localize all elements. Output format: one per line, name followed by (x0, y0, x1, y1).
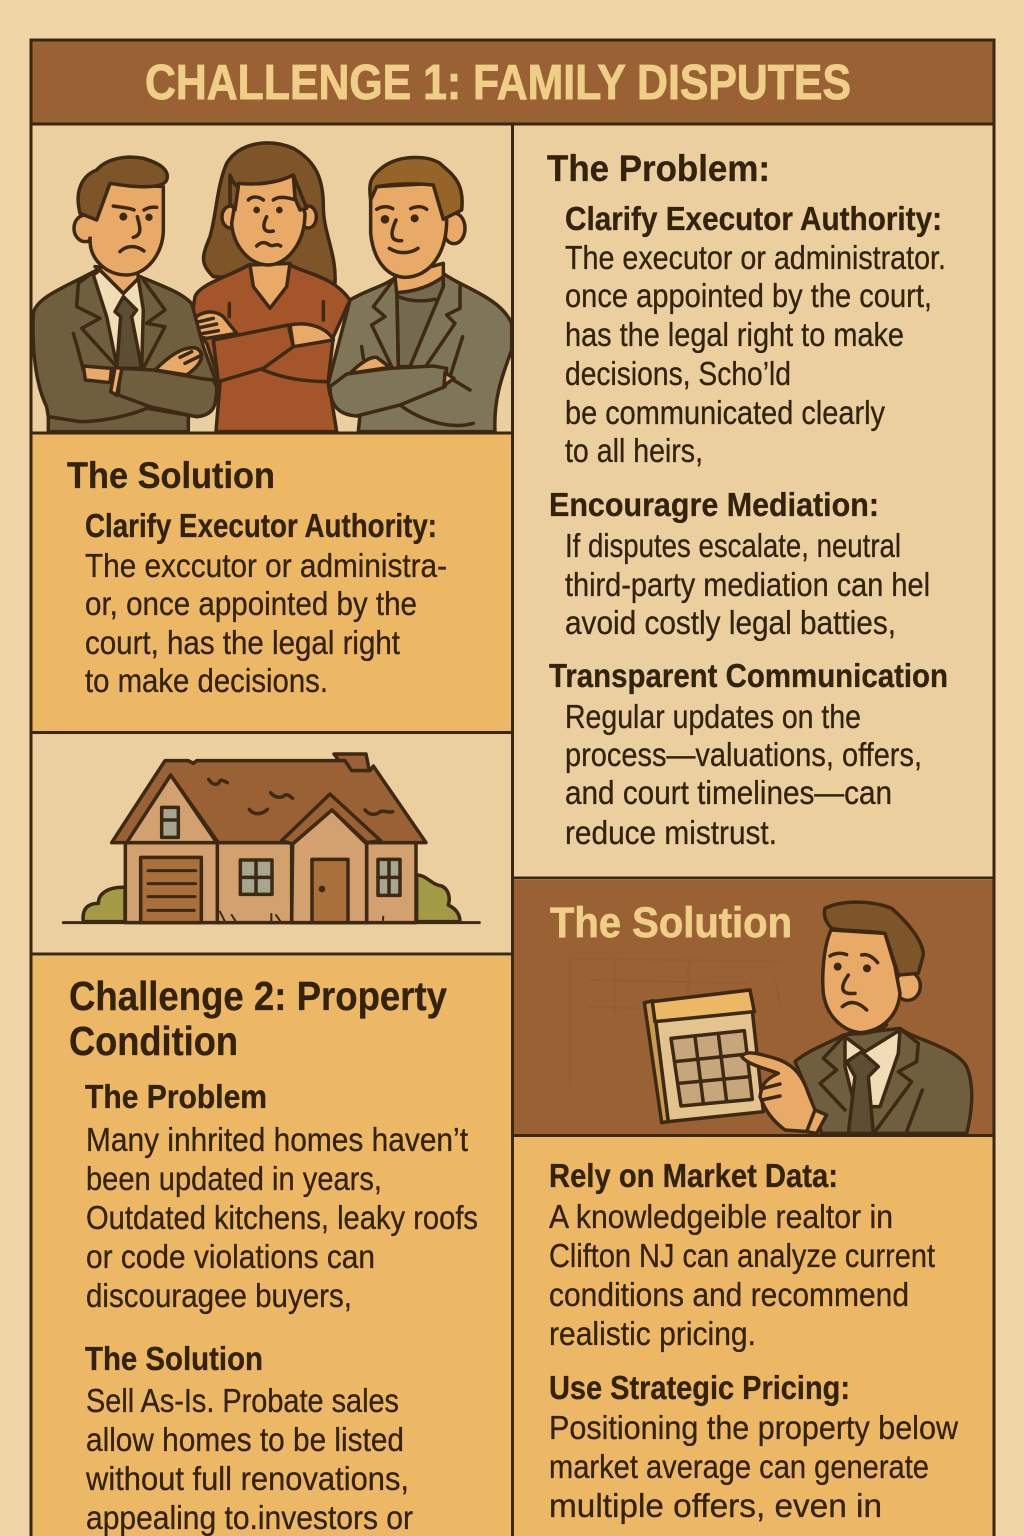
panel: challenge 2 property condition: Outdated kitchens, leaky roofs (86, 1199, 478, 1236)
panel: challenge 2 property condition: Many inhrited homes haven’t (86, 1121, 468, 1158)
panel: market data and pricing: Rely on Market Data: (549, 1157, 838, 1194)
panel: the problem, right column: decisions, Scho’ld (565, 355, 791, 392)
panel: the problem, right column: If disputes escalate, neutral (565, 527, 901, 564)
title banner (31, 40, 994, 124)
panel: challenge 2 property condition: appealing to.investors or (86, 1499, 413, 1536)
panel: the solution, challenge 1: or, once appointed by the (85, 585, 417, 622)
panel: challenge 2 property condition: Challenge 2: Property (69, 973, 447, 1019)
panel: market data and pricing: conditions and recommend (549, 1276, 909, 1313)
panel: the problem, right column: to all heirs, (565, 432, 703, 469)
panel: the problem, right column: Transparent Communication (549, 657, 948, 694)
panel: the problem, right column: reduce mistrust. (565, 814, 777, 851)
panel: challenge 2 property condition: Condition (69, 1018, 238, 1064)
panel: the problem, right column: third-party mediation can hel (565, 566, 930, 603)
man left (48, 407, 188, 432)
panel: market data and pricing: Clifton NJ can analyze current (549, 1237, 935, 1274)
panel: the problem, right column: Encouragre Mediation: (549, 486, 879, 523)
panel: the problem, right column: and court timelines—can (565, 774, 892, 811)
panel: market data and pricing (514, 1137, 993, 1536)
panel: the problem, right column: has the legal right to make (565, 316, 904, 353)
panel: the solution banner with advisor: The Solution (550, 899, 792, 947)
panel: challenge 2 property condition: The Solution (85, 1340, 263, 1377)
panel: market data and pricing: Use Strategic Pricing: (549, 1369, 850, 1406)
panel: the problem, right column: avoid costly legal batties, (565, 604, 896, 641)
panel: the solution, challenge 1: court, has the legal right (85, 624, 400, 661)
panel: challenge 2 property condition: The Problem (85, 1078, 267, 1115)
panel: the solution banner with advisor (514, 880, 993, 1134)
panel: market data and pricing: A knowledgeible realtor in (549, 1198, 893, 1235)
panel: challenge 2 property condition: allow homes to be listed (86, 1421, 404, 1458)
panel: the solution, challenge 1: The exccutor or administra- (85, 547, 447, 584)
panel: the problem, right column (514, 125, 993, 878)
panel: challenge 2 property condition: without full renovations, (85, 1460, 409, 1497)
panel: market data and pricing: realistic pricing. (549, 1315, 756, 1352)
panel: market data and pricing: multiple offers, even in (549, 1487, 882, 1524)
man right (328, 273, 512, 432)
panel: the problem, right column: once appointed by the court, (565, 277, 932, 314)
panel: challenge 2 property condition: or code violations can (86, 1238, 375, 1275)
panel: market data and pricing: market average can generate (549, 1448, 929, 1485)
panel: the problem, right column: be communicated clearly (565, 394, 885, 431)
panel: the solution, challenge 1: to make decisions. (85, 662, 328, 699)
panel: the problem, right column: The executor or administrator. (565, 239, 946, 276)
panel: house illustration (32, 734, 512, 953)
panel: the solution, challenge 1: Clarify Executor Authority: (85, 507, 437, 544)
panel: challenge 2 property condition: discouragee buyers, (86, 1277, 352, 1314)
panel: the solution, challenge 1: The Solution (67, 455, 275, 496)
panel: challenge 2 property condition: Sell As-Is. Probate sales (86, 1382, 399, 1419)
panel: market data and pricing: Positioning the property below (549, 1409, 958, 1446)
panel: feuding family illustration (32, 125, 512, 433)
panel: challenge 2 property condition: been updated in years, (86, 1160, 382, 1197)
panel: the problem, right column: The Problem: (547, 148, 770, 189)
panel: the problem, right column: Clarify Executor Authority: (565, 200, 942, 237)
panel: challenge 2 property condition (32, 956, 512, 1536)
title banner: CHALLENGE 1: FAMILY DISPUTES (145, 56, 851, 110)
panel: the solution, challenge 1 (32, 434, 512, 732)
panel: the problem, right column: Regular updates on the (565, 698, 861, 735)
panel: the problem, right column: process—valuations, offers, (565, 736, 922, 773)
